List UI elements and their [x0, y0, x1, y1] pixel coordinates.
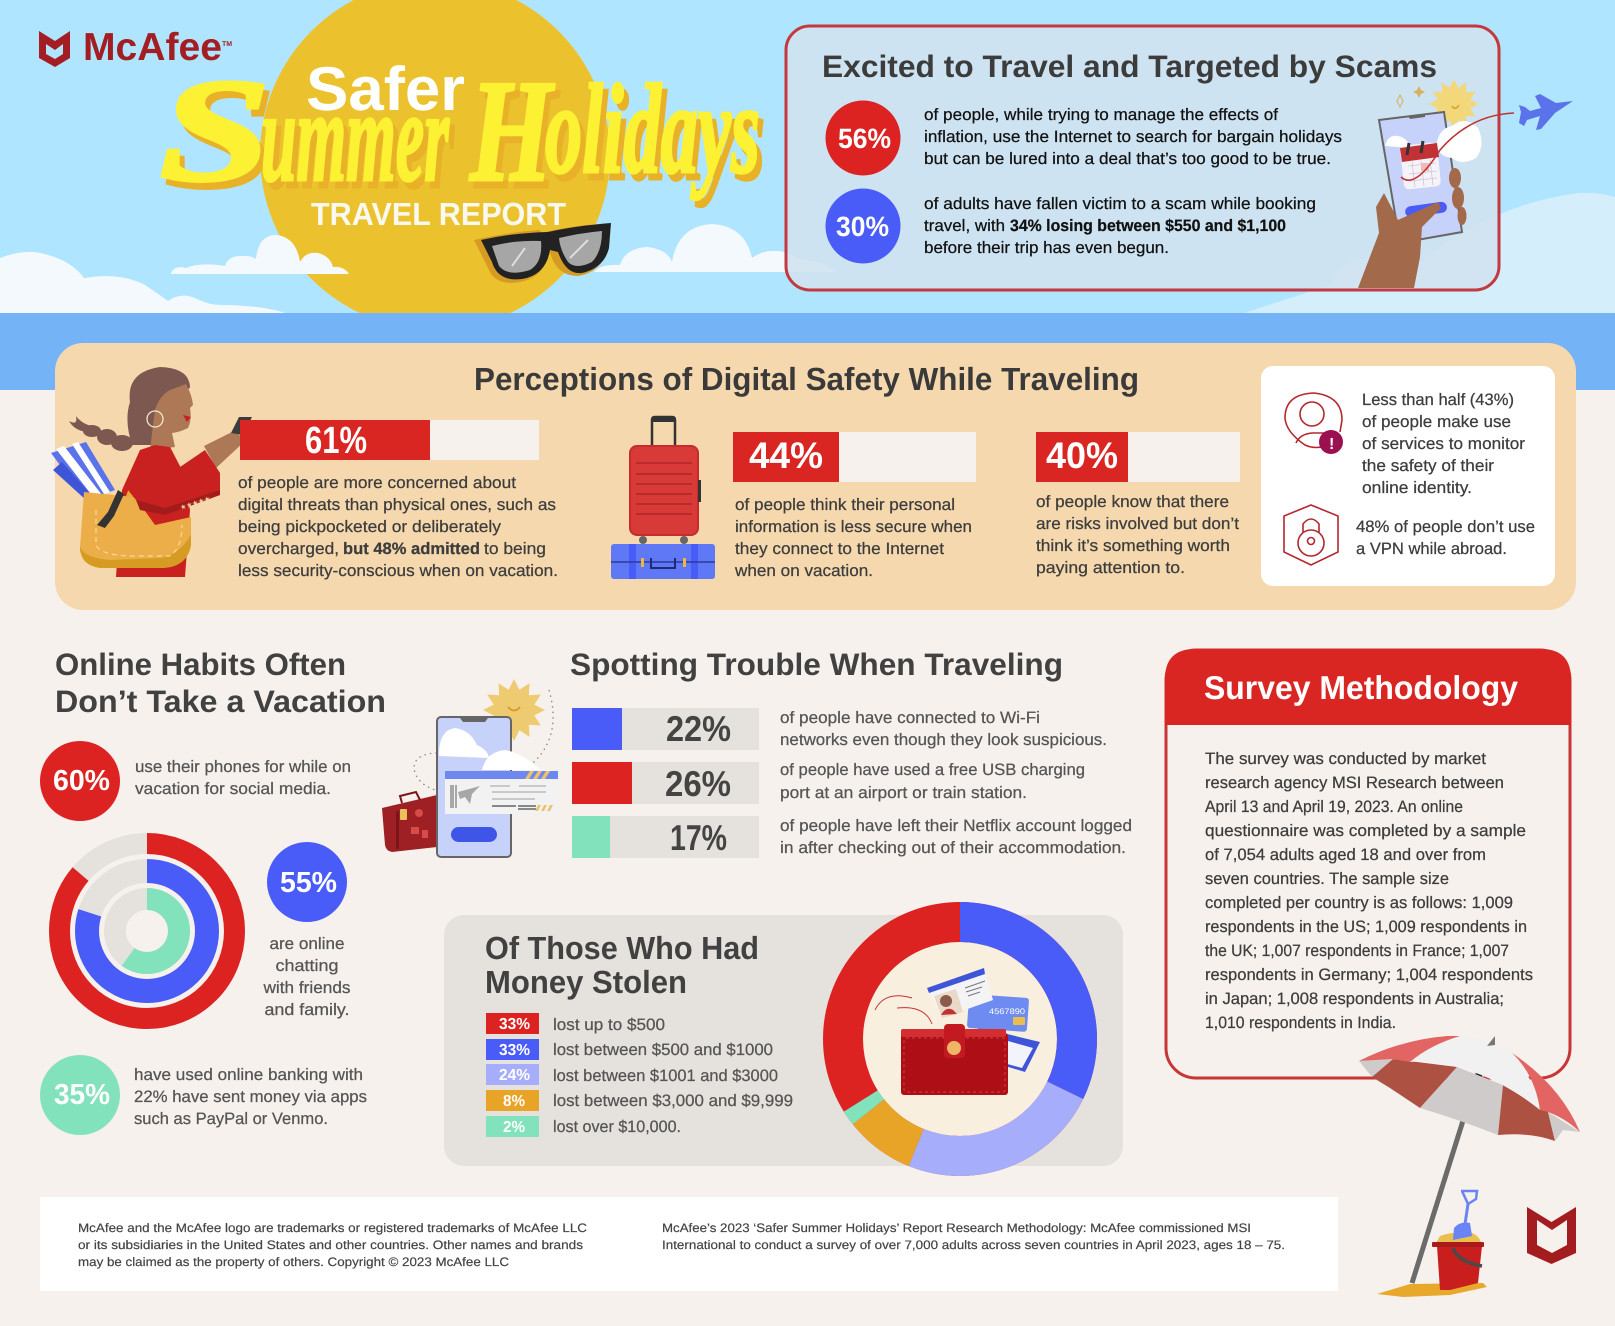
script title: Summer Holidays: H: [469, 50, 555, 212]
text: methodology body: [1205, 750, 1533, 1032]
text: 26% description: port at an airport or train station.: [780, 784, 1027, 802]
icon: wallet with cards: [875, 968, 1040, 1095]
text: 26% description: of people have used a free USB charging: [780, 761, 1085, 779]
text: 44% description: information is less secure when: [735, 518, 972, 536]
panel: perceptions of digital safety: [51, 343, 1576, 610]
legend row: 33% up to $500: 33%: [499, 1016, 530, 1033]
legend row: 2% over $10,000: lost over $10,000.: [553, 1118, 681, 1136]
text: 35% description: such as PayPal or Venmo.: [134, 1110, 328, 1128]
text: methodology body: questionnaire was completed by a sample: [1205, 822, 1526, 840]
sea band: [0, 313, 1615, 390]
text: 17% description: [780, 817, 1132, 857]
legend row: 8% $3,000 to $9,999: 8%: [503, 1093, 525, 1110]
script title: Summer Holidays: S: [159, 49, 271, 213]
text: trademark notice: [78, 1221, 587, 1269]
bar: 22%: [572, 708, 759, 750]
text: methodology body: in Japan; 1,008 respondents in Australia;: [1205, 990, 1504, 1008]
text: VPN use: 48% of people don’t use: [1356, 518, 1535, 536]
stat: 55%: [267, 842, 347, 922]
text: 44% description: [734, 496, 972, 580]
illustration: phone with boarding pass: [382, 679, 558, 857]
legend row: 2% over $10,000: 2%: [503, 1119, 525, 1136]
text: methodology body: completed per country is as follows: 1,009: [1205, 894, 1513, 912]
text: methodology body: respondents in Germany; 1,004 respondents: [1205, 966, 1533, 984]
illustration: woman with phone and bag: [51, 367, 252, 577]
heading: Money Stolen: [485, 964, 687, 1000]
legend row: 33% up to $500: [486, 1013, 665, 1034]
panel: excited to travel: [786, 26, 1573, 290]
text: identity monitoring: Less than half (43%): [1362, 391, 1514, 409]
legend row: 2% over $10,000: [486, 1116, 681, 1137]
text: identity monitoring: the safety of their: [1362, 457, 1495, 475]
bar: 26%: 26%: [665, 763, 731, 804]
text: 26% description: [780, 761, 1085, 802]
text: research note: International to conduct a survey of over 7,000 adults across seven countries in April 2023, ages 18 – 75.: [662, 1238, 1285, 1252]
text: 56% description: inflation, use the Internet to search for bargain holidays: [924, 128, 1342, 146]
text: 22% description: [780, 709, 1107, 749]
stat: 60%: 60%: [53, 765, 110, 797]
subtitle: Travel Report: TRAVEL REPORT: [311, 196, 566, 232]
heading: [485, 930, 759, 1000]
text: 61% description: digital threats than physical ones, such as: [238, 496, 556, 514]
text: methodology body: April 13 and April 19, 2023. An online: [1205, 798, 1463, 816]
script title: Summer Holidays: olidays: [545, 58, 760, 200]
text: 61% description: to being: [484, 540, 546, 558]
stat: 56%: [826, 100, 900, 176]
heading: Online Habits Often: [55, 647, 346, 682]
text: 61% description: but 48% admitted: [343, 540, 480, 558]
text: 60% description: use their phones for while on: [135, 758, 351, 776]
panel: survey methodology: [1165, 649, 1571, 1078]
icon: hand holding phone: [1358, 79, 1573, 288]
stat: 35%: [40, 1055, 120, 1135]
text: 56% description: [924, 106, 1342, 168]
bar: 40%: [1036, 432, 1240, 482]
heading: Excited to Travel and Targeted by Scams: [822, 49, 1437, 84]
section: spotting trouble: [570, 647, 1132, 858]
panel: money stolen: [444, 915, 1123, 1166]
bar: 44%: 44%: [749, 435, 823, 476]
text: VPN use: a VPN while abroad.: [1356, 540, 1507, 558]
text: 35% description: [134, 1066, 367, 1128]
text: trademark notice: McAfee and the McAfee logo are trademarks or registered trademarks of McAfee LLC: [78, 1221, 587, 1235]
text: identity monitoring: [1362, 391, 1526, 497]
text: 55% description: with friends: [262, 979, 350, 997]
stat: 35%: 35%: [54, 1079, 110, 1111]
heading: Of Those Who Had: [485, 930, 759, 966]
text: 61% description: [238, 474, 558, 580]
bar: 44%: [733, 432, 976, 482]
chart: money stolen donut: [796, 875, 1124, 1203]
text: methodology body: the UK; 1,007 respondents in France; 1,007: [1205, 942, 1509, 960]
text: 44% description: they connect to the Internet: [735, 540, 944, 558]
title: Safer Summer Holidays Travel Report: [159, 49, 765, 232]
footer box: [40, 1197, 1338, 1291]
legend row: 8% $3,000 to $9,999: lost between $3,000 and $9,999: [553, 1092, 793, 1110]
bar: 61%: 61%: [305, 420, 367, 462]
stat: 30%: [826, 188, 900, 264]
legend row: 33% $500 to $1000: lost between $500 and $1000: [553, 1041, 773, 1059]
illustration: woman with phone and bag: ★★★★★: [179, 495, 211, 512]
script title: Summer Holidays: ummer: [261, 65, 450, 209]
stat: 30%: 30%: [836, 211, 889, 242]
text: methodology body: seven countries. The sample size: [1205, 870, 1449, 888]
bar: 17%: 17%: [670, 817, 727, 858]
text: research note: McAfee’s 2023 ‘Safer Summer Holidays’ Report Research Methodology: McAfee commissioned MSI: [662, 1221, 1251, 1235]
text: 61% description: being pickpocketed or deliberately: [238, 518, 502, 536]
cloud: right: [594, 224, 835, 272]
script title: Summer Holidays: [159, 49, 760, 213]
icon: wallet with cards: 4567890: [989, 1007, 1026, 1016]
cloud: middle: [171, 235, 349, 274]
text: methodology body: research agency MSI Research between: [1205, 774, 1504, 792]
text: methodology body: respondents in the US; 1,009 respondents in: [1205, 918, 1527, 936]
McAfee logo: TM: [222, 41, 232, 48]
text: 61% description: of people are more concerned about: [238, 474, 516, 492]
bar: 26%: [572, 762, 759, 804]
text: 40% description: [1036, 493, 1239, 577]
stat: 60%: [40, 741, 120, 821]
text: 40% description: think it’s something worth: [1036, 537, 1230, 555]
text: 22% description: networks even though they look suspicious.: [780, 731, 1107, 749]
text: 56% description: of people, while trying to manage the effects of: [924, 106, 1278, 124]
chart: concentric rings: [60, 844, 234, 1018]
script title shadow: S: [164, 56, 276, 220]
legend row: 33% $500 to $1000: [486, 1039, 773, 1060]
title word: Safer: Safer: [306, 55, 465, 124]
text: 60% description: [135, 758, 351, 798]
heading: Don’t Take a Vacation: [55, 684, 386, 719]
legend: [486, 1013, 793, 1137]
script title shadow: H: [474, 57, 560, 219]
icon: sunglasses: [474, 223, 611, 283]
legend row: 24% $1001 to $3000: lost between $1001 and $3000: [553, 1067, 778, 1085]
text: 30% description: travel, with: [924, 217, 1005, 235]
text: research note: [662, 1221, 1285, 1252]
text: 55% description: and family.: [264, 1001, 350, 1019]
text: 60% description: vacation for social media.: [135, 780, 331, 798]
text: VPN use: [1356, 518, 1535, 558]
heading: Spotting Trouble When Traveling: [570, 647, 1063, 682]
text: 22% description: of people have connected to Wi-Fi: [780, 709, 1040, 727]
icon: identity alert: [1285, 393, 1343, 454]
text: 35% description: have used online banking with: [134, 1066, 363, 1084]
illustration: beach umbrella and bucket: [1359, 1036, 1580, 1297]
text: 55% description: [262, 935, 350, 1019]
legend row: 24% $1001 to $3000: 24%: [499, 1067, 530, 1084]
script title shadow: olidays: [550, 65, 765, 207]
cloud: far right: [1244, 193, 1615, 313]
text: identity monitoring: of people make use: [1362, 413, 1511, 431]
text: 61% description: less security-conscious when on vacation.: [238, 562, 558, 580]
text: 35% description: 22% have sent money via apps: [134, 1088, 367, 1106]
text: 17% description: in after checking out of their accommodation.: [780, 839, 1126, 857]
text: 40% description: of people know that there: [1036, 493, 1229, 511]
heading: Perceptions of Digital Safety While Traveling: [474, 361, 1139, 397]
bar: 17%: [572, 816, 759, 858]
header sky: [0, 0, 1615, 330]
text: 55% description: chatting: [276, 957, 338, 975]
bar: 61%: [240, 420, 539, 462]
card: identity and VPN facts: [1261, 366, 1555, 586]
legend row: 33% $500 to $1000: 33%: [499, 1042, 530, 1059]
heading: Survey Methodology: [1204, 669, 1519, 706]
bar: 22%: 22%: [666, 708, 731, 749]
text: 30% description: [924, 195, 1316, 257]
legend row: 8% $3,000 to $9,999: [486, 1090, 793, 1111]
text: 44% description: when on vacation.: [734, 562, 873, 580]
stat: 55%: 55%: [280, 867, 337, 899]
text: 30% description: of adults have fallen victim to a scam while booking: [924, 195, 1316, 213]
text: 44% description: of people think their personal: [735, 496, 955, 514]
heading: [55, 647, 386, 719]
text: 56% description: but can be lured into a deal that’s too good to be true.: [924, 150, 1331, 168]
text: trademark notice: or its subsidiaries in the United States and other countries. Other names and brands: [78, 1238, 583, 1252]
text: 61% description: overcharged,: [238, 540, 339, 558]
text: identity monitoring: of services to monitor: [1362, 435, 1526, 453]
cloud: lower left: [0, 252, 285, 313]
header band: [1165, 649, 1571, 725]
sun: [260, 0, 610, 330]
icon: luggage: [611, 416, 715, 579]
script title shadow: ummer: [266, 72, 455, 216]
text: methodology body: 1,010 respondents in India.: [1205, 1014, 1396, 1032]
text: methodology body: The survey was conducted by market: [1205, 750, 1486, 768]
text: 30% description: 34% losing between $550 and $1,100: [1010, 217, 1286, 235]
McAfee logo: McAfee: [83, 26, 222, 69]
text: 40% description: are risks involved but don’t: [1036, 515, 1239, 533]
icon: McAfee shield: [1527, 1207, 1576, 1264]
icon: shield with padlock: [1284, 505, 1338, 565]
text: trademark notice: may be claimed as the property of others. Copyright © 2023 McAfee LLC: [78, 1255, 509, 1269]
legend row: 33% up to $500: lost up to $500: [553, 1016, 665, 1034]
bar: 40%: 40%: [1046, 435, 1118, 476]
text: 30% description: before their trip has even begun.: [924, 239, 1169, 257]
section: online habits: [40, 647, 386, 1135]
icon: identity alert: !: [1329, 436, 1334, 453]
stat: 56%: 56%: [838, 123, 891, 154]
text: methodology body: of 7,054 adults aged 18 and over from: [1205, 846, 1486, 864]
text: 40% description: paying attention to.: [1036, 559, 1185, 577]
legend row: 24% $1001 to $3000: [486, 1064, 778, 1085]
text: 17% description: of people have left their Netflix account logged: [780, 817, 1132, 835]
text: identity monitoring: online identity.: [1362, 479, 1472, 497]
script title shadow: [164, 56, 765, 220]
text: 55% description: are online: [270, 935, 344, 953]
